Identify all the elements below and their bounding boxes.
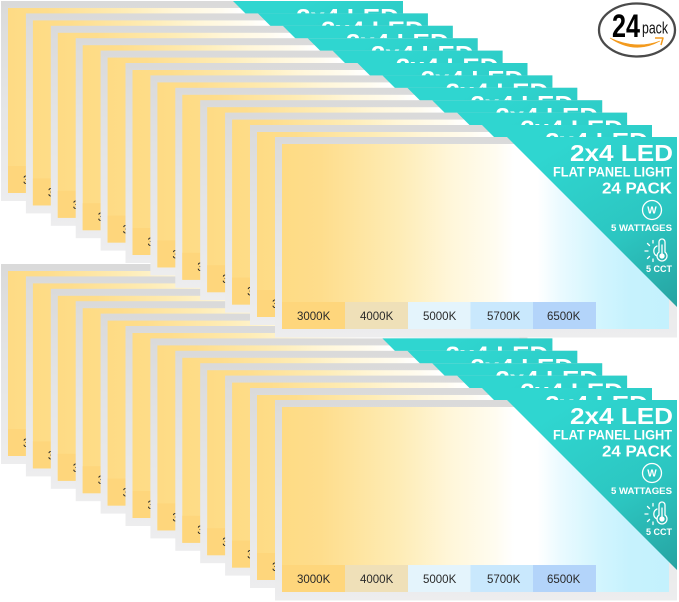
colour temperature swatches	[282, 565, 596, 592]
panel U11	[250, 125, 652, 325]
panel L8: 2x4 LED	[470, 354, 573, 380]
panel U10: 2x4 LED	[520, 116, 623, 142]
teal corner banner	[507, 137, 677, 307]
panel U11: 3000K	[272, 299, 306, 311]
panel L5	[101, 314, 503, 514]
panel U3: 2x4 LED	[346, 29, 449, 55]
panel U6	[126, 63, 528, 263]
colour temperature swatches: 5700K	[487, 311, 521, 323]
teal corner banner: 5 WATTAGES	[611, 223, 672, 234]
panel U5	[101, 51, 503, 251]
colour temperature swatches: 3000K	[297, 574, 331, 586]
panel U4	[76, 38, 478, 238]
panel U3	[51, 26, 453, 226]
teal corner banner: 2x4 LED	[570, 403, 673, 429]
teal corner banner: 5 WATTAGES	[611, 486, 672, 497]
panel L8: 3000K	[197, 525, 231, 537]
panel L9	[200, 363, 602, 563]
colour temperature swatches: 5000K	[423, 574, 457, 586]
panel U6: 2x4 LED	[420, 66, 524, 92]
panel U7: 2x4 LED	[445, 78, 548, 104]
panel L6	[126, 326, 528, 526]
panel U3: 3000K	[73, 200, 106, 212]
panel L11: 2x4 LED	[545, 391, 648, 417]
colour temperature swatches: 3000K	[297, 311, 331, 323]
teal corner banner: 5 CCT	[646, 527, 672, 538]
panel L10	[225, 376, 627, 576]
panel U2: 3000K	[48, 187, 81, 199]
panel U6: 3000K	[148, 237, 181, 249]
panel L4	[76, 301, 478, 501]
panel U4: 3000K	[98, 212, 131, 224]
panel U10	[225, 113, 627, 313]
badge: 24 pack: 24	[612, 8, 640, 44]
panel L5: 3000K	[123, 488, 156, 500]
panel L8	[175, 351, 577, 551]
panel U2	[26, 13, 428, 213]
panel L1: 3000K	[23, 438, 57, 450]
panel U9: 3000K	[222, 274, 256, 286]
panel L10: 2x4 LED	[520, 379, 623, 405]
panel U1	[1, 1, 403, 201]
colour temperature swatches: 4000K	[360, 574, 394, 586]
panel U9	[200, 100, 602, 300]
panel U1: 2x4 LED	[296, 4, 399, 30]
panel U7	[150, 75, 552, 275]
panel L11	[250, 388, 652, 588]
panel U4: 2x4 LED	[371, 41, 474, 67]
panel L2	[26, 276, 428, 476]
colour temperature swatches: 6500K	[547, 574, 581, 586]
teal corner banner: W	[647, 206, 657, 216]
panel: lower front	[275, 400, 677, 600]
teal corner banner: 2x4 LED	[570, 140, 673, 166]
panel U5: 2x4 LED	[396, 54, 499, 80]
panel L10: 3000K	[247, 550, 281, 562]
colour temperature swatches: 5700K	[487, 574, 521, 586]
colour temperature swatches: 6500K	[547, 311, 581, 323]
panel L7	[150, 338, 552, 538]
panel U10: 3000K	[247, 287, 281, 299]
panel L4: 3000K	[98, 475, 131, 487]
badge: 24 pack: pack	[642, 18, 668, 38]
panel L7: 3000K	[172, 512, 206, 524]
panel U8: 2x4 LED	[470, 91, 573, 117]
teal corner banner: 24 PACK	[602, 444, 673, 460]
colour temperature swatches: 4000K	[360, 311, 394, 323]
panel L9: 3000K	[222, 537, 256, 549]
teal corner banner: FLAT PANEL LIGHT	[553, 428, 673, 442]
panel L2: 3000K	[48, 450, 81, 462]
panel U7: 3000K	[172, 249, 206, 261]
teal corner banner: W	[647, 468, 657, 480]
panel U11: 2x4 LED	[545, 128, 648, 154]
panel L1	[1, 264, 403, 464]
panel L6: 3000K	[148, 500, 181, 512]
panel U9: 2x4 LED	[495, 103, 598, 129]
colour temperature swatches	[282, 302, 596, 329]
panel L9: 2x4 LED	[495, 366, 598, 392]
panel L3: 3000K	[73, 463, 106, 475]
panel U1: 3000K	[23, 175, 57, 187]
teal corner banner: 5 CCT	[646, 264, 672, 275]
colour temperature swatches: 5000K	[423, 311, 457, 323]
lower stack of panels	[1, 264, 677, 600]
teal corner banner: FLAT PANEL LIGHT	[553, 164, 673, 180]
panel L11: 3000K	[272, 562, 306, 574]
teal corner banner	[507, 400, 677, 570]
panel U8	[175, 88, 577, 288]
panel L7: 2x4 LED	[445, 341, 548, 367]
panel U5: 3000K	[123, 225, 156, 237]
panel U2: 2x4 LED	[321, 16, 424, 42]
teal corner banner: 24 PACK	[602, 180, 673, 198]
panel: upper front	[275, 137, 677, 338]
panel L3	[51, 289, 453, 489]
upper stack of panels	[1, 1, 677, 338]
badge: 24 pack	[599, 4, 675, 56]
panel U8: 3000K	[197, 262, 231, 274]
